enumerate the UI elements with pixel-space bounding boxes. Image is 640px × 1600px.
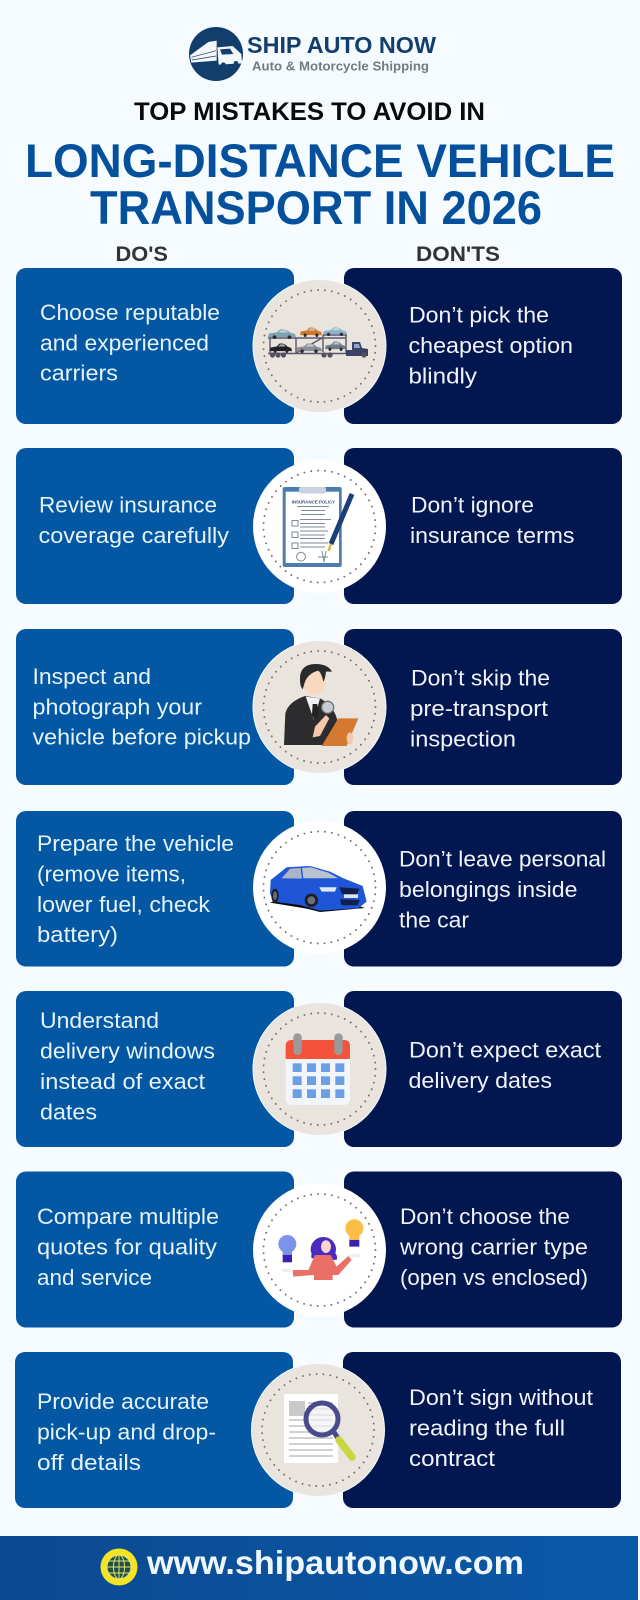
don't card 7 xyxy=(343,1352,621,1508)
row 5 xyxy=(16,991,622,1147)
do card 2: coverage carefully xyxy=(38,523,229,548)
row 1 xyxy=(16,268,622,424)
website url: www.shipautonow.com xyxy=(146,1544,524,1581)
do card 5 xyxy=(16,991,294,1147)
main title line 1: LONG-DISTANCE VEHICLE xyxy=(25,134,615,187)
don't card 5: delivery dates xyxy=(408,1068,552,1093)
don't card 3: pre-transport xyxy=(410,696,548,721)
do card 3 xyxy=(16,629,294,785)
do card 5: delivery windows xyxy=(40,1038,215,1064)
don't card 5 xyxy=(344,991,622,1147)
don't card 7: Don’t sign without xyxy=(409,1385,593,1410)
do card 7: pick-up and drop- xyxy=(37,1420,216,1444)
do card 1 xyxy=(16,268,294,424)
icon: blue car xyxy=(253,821,386,954)
do card 6: and service xyxy=(37,1265,152,1290)
don't card 1: cheapest option xyxy=(408,333,573,358)
footer xyxy=(0,1536,638,1600)
title xyxy=(25,98,615,234)
do card 7: Provide accurate xyxy=(37,1389,209,1414)
do card 3: vehicle before pickup xyxy=(32,725,251,750)
don't card 7: reading the full xyxy=(409,1416,565,1440)
don't card 3: Don’t skip the xyxy=(411,666,550,691)
do card 1: Choose reputable xyxy=(40,300,220,325)
row 7 xyxy=(15,1352,621,1508)
don't card 6: (open vs enclosed) xyxy=(400,1265,588,1290)
do card 1: and experienced xyxy=(40,330,209,355)
do card 7 xyxy=(15,1352,293,1508)
don't card 6: wrong carrier type xyxy=(399,1234,588,1260)
do card 3: photograph your xyxy=(32,694,202,720)
do card 7: off details xyxy=(37,1450,141,1475)
column heading: don'ts: DON'TS xyxy=(416,243,500,266)
don't card 3: inspection xyxy=(410,726,516,752)
do card 5: instead of exact xyxy=(40,1069,205,1094)
don't card 1 xyxy=(344,268,622,424)
do card 6 xyxy=(16,1172,294,1328)
footer band xyxy=(0,1536,638,1600)
don't card 4: Don’t leave personal xyxy=(399,847,606,872)
do card 5: Understand xyxy=(40,1008,159,1033)
don't card 6: Don’t choose the xyxy=(400,1204,570,1229)
do card 6: Compare multiple xyxy=(37,1204,219,1229)
do card 2 xyxy=(16,448,294,604)
don't card 7: contract xyxy=(409,1446,495,1471)
don't card 5: Don’t expect exact xyxy=(409,1038,601,1063)
main title line 2: TRANSPORT IN 2026 xyxy=(90,181,542,234)
don't card 4: the car xyxy=(399,908,469,932)
don't card 4: belongings inside xyxy=(399,877,578,902)
do card 5: dates xyxy=(40,1100,97,1124)
title eyebrow: TOP MISTAKES TO AVOID IN xyxy=(134,98,485,126)
do card 2: Review insurance xyxy=(39,493,217,518)
do card 4: Prepare the vehicle xyxy=(37,831,234,856)
do card 4: battery) xyxy=(37,922,118,947)
logo tagline: Auto & Motorcycle Shipping xyxy=(252,60,429,74)
don't card 1: blindly xyxy=(408,364,477,388)
icon: car carrier truck xyxy=(253,280,386,412)
logo name: SHIP AUTO NOW xyxy=(247,32,436,58)
don't card 1: Don’t pick the xyxy=(409,303,549,328)
row 4 xyxy=(16,811,622,966)
icon: document under magnifying glass xyxy=(252,1364,384,1496)
row 3 xyxy=(16,629,622,785)
icon: insurance policy clipboard: INSURANCE POLICY xyxy=(292,500,335,504)
column heading: do's: DO'S xyxy=(116,243,168,266)
logo badge with truck xyxy=(189,27,243,81)
don't card 2 xyxy=(344,448,622,604)
icon: calendar xyxy=(253,1002,386,1136)
don't card 2: Don’t ignore xyxy=(411,493,534,518)
do card 6: quotes for quality xyxy=(37,1234,217,1260)
do card 1: carriers xyxy=(40,361,118,386)
row 2 xyxy=(16,448,622,604)
don't card 6 xyxy=(344,1172,622,1328)
icon: inspector with magnifying glass and clipboard xyxy=(253,640,386,774)
logo xyxy=(189,27,436,81)
do card 4 xyxy=(16,811,294,966)
do card 4: (remove items, xyxy=(37,862,186,886)
don't card 2: insurance terms xyxy=(410,523,574,548)
do card 4: lower fuel, check xyxy=(37,892,211,917)
row 6 xyxy=(16,1172,622,1328)
don't card 4 xyxy=(344,811,622,966)
don't card 3 xyxy=(344,629,622,785)
icon: insurance policy clipboard xyxy=(253,460,386,593)
do card 3: Inspect and xyxy=(32,664,151,689)
icon: globe xyxy=(100,1548,138,1586)
icon: woman weighing two light bulbs xyxy=(253,1184,386,1316)
